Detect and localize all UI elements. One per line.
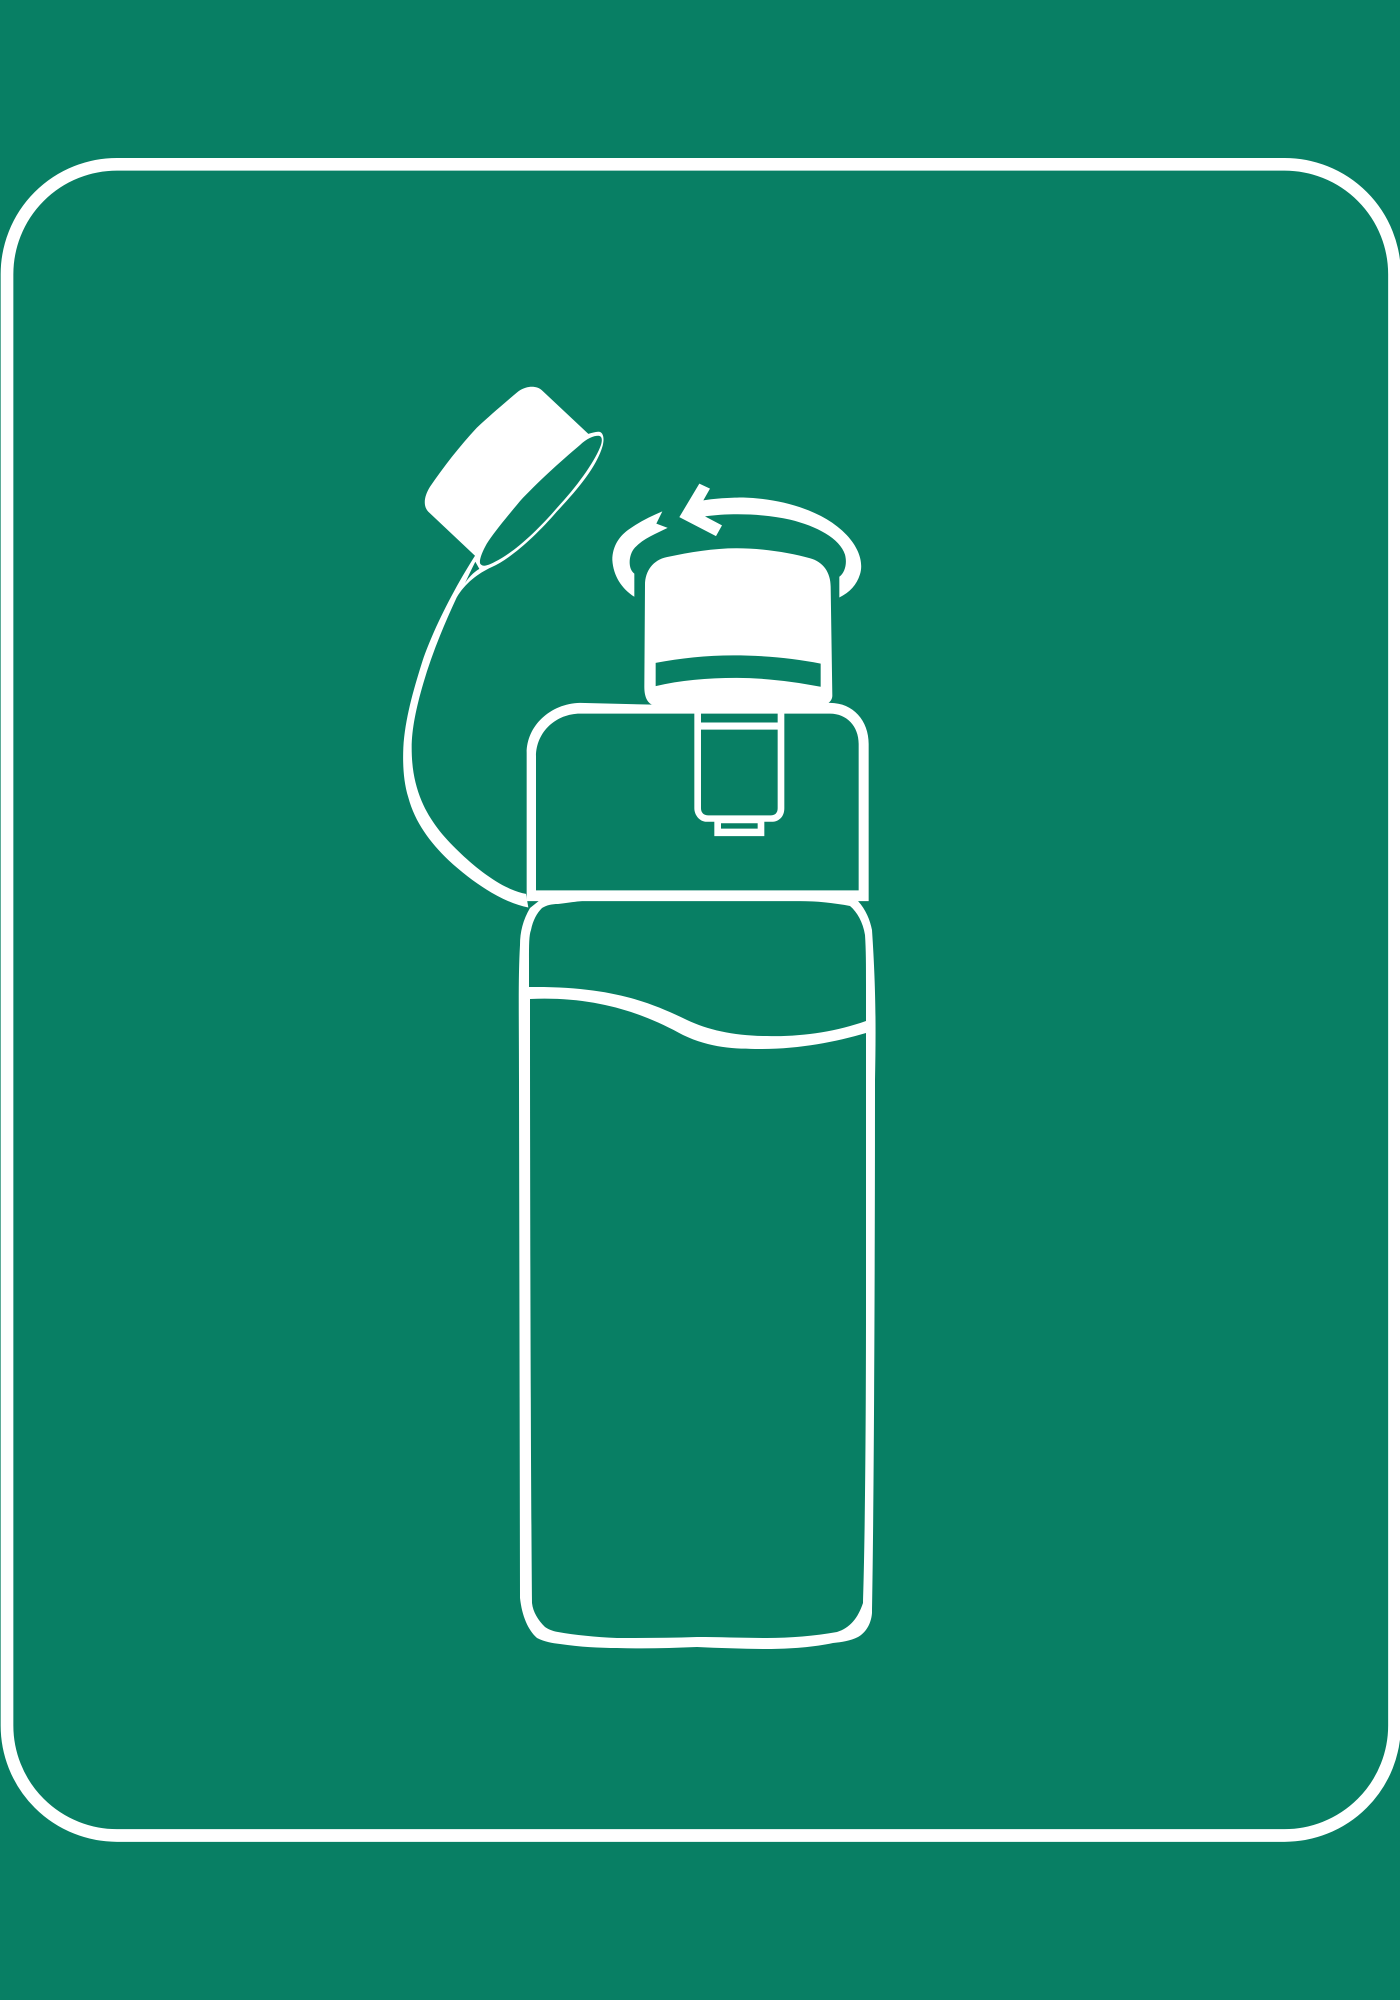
bottle body with wave-shaped grip line — [519, 896, 876, 1649]
open lid with strap — [403, 387, 604, 907]
icon: bottle — [403, 387, 876, 1649]
upper parts in crop coordinates — [403, 387, 869, 907]
icon: rotation arrow, left part — [612, 511, 668, 597]
icon: rotation arrow, right part with head — [679, 484, 861, 597]
shoulder and neck of bottle — [527, 703, 869, 901]
closed screw cap on bottle — [644, 548, 832, 705]
